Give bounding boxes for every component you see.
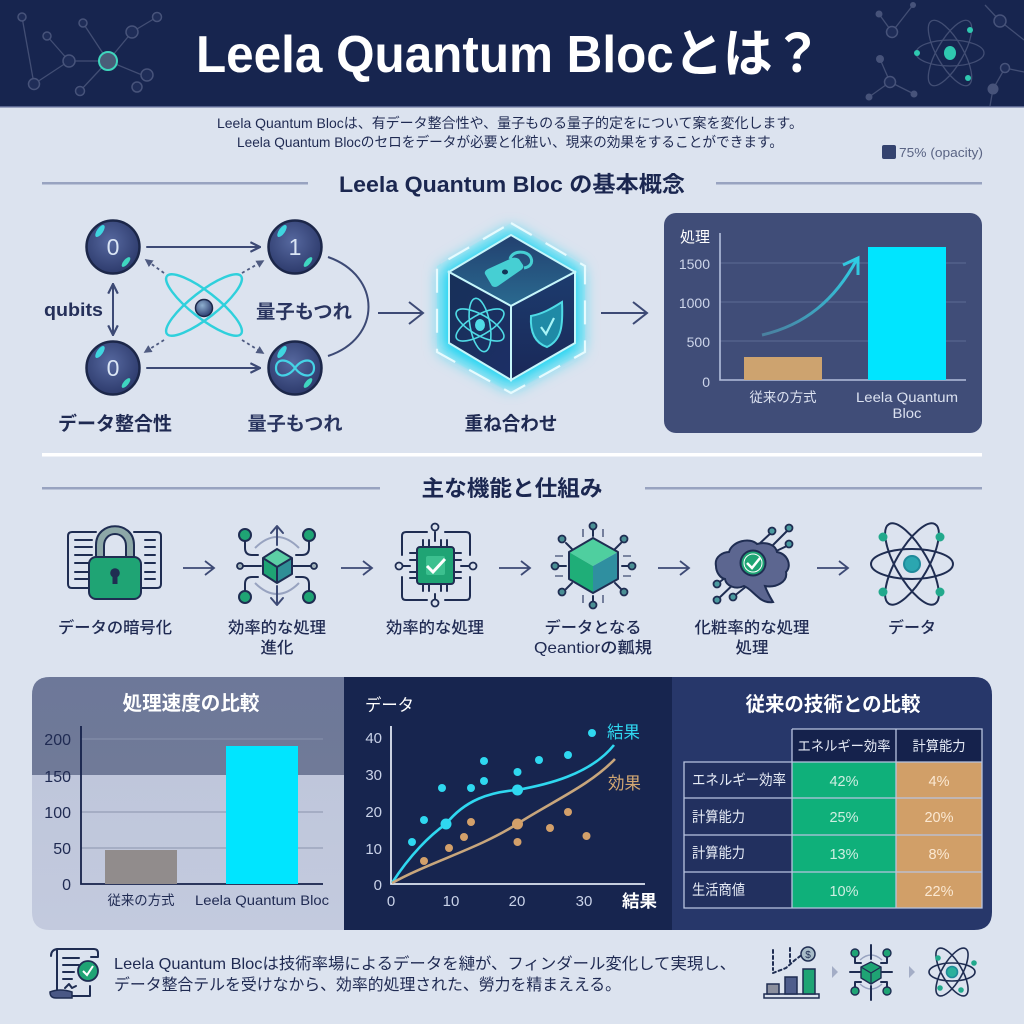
panel: data scatter chart bbox=[344, 677, 672, 930]
panel: throughput bar chart: 1500 bbox=[679, 256, 710, 272]
label: superposition: 重ね合わせ bbox=[464, 413, 558, 435]
panel: throughput bar chart: Bloc bbox=[892, 406, 922, 421]
table cells: 42% bbox=[829, 774, 859, 790]
panel: data scatter chart: 20 bbox=[365, 804, 382, 821]
table cells: 10% bbox=[829, 884, 859, 900]
panel: comparison table bbox=[672, 677, 992, 930]
cyan trend and points bbox=[392, 729, 614, 883]
qubits label: qubits bbox=[44, 300, 103, 320]
qubit 1: 1 bbox=[289, 234, 301, 260]
qubit infinity bbox=[268, 342, 322, 394]
footer icon: atom bbox=[929, 944, 977, 1000]
table cells: 8% bbox=[929, 847, 950, 863]
panel: comparison table: 従来の技術との比較 bbox=[746, 692, 920, 716]
process step 4: data hex cube: データとなる bbox=[544, 618, 642, 637]
panel: throughput bar chart: 処理 bbox=[680, 229, 710, 246]
glowing quantum cube bbox=[437, 223, 585, 393]
panel: data scatter chart: 0 bbox=[374, 877, 382, 894]
divider bbox=[42, 453, 982, 456]
growth arrow bbox=[762, 258, 858, 335]
panel: data scatter chart: 0 bbox=[387, 893, 395, 910]
footer text: Leela Quantum Blocは技術率場によるデータを縺が、フィンダール変化して実現し、 bbox=[114, 954, 736, 973]
table cells: エネルギー効率 bbox=[692, 772, 786, 789]
process step 2: efficient processing: 効率的な処理 bbox=[228, 619, 326, 637]
panel: data scatter chart: 10 bbox=[443, 893, 459, 910]
footer arrow bbox=[832, 966, 838, 978]
arrow to chart bbox=[601, 302, 647, 324]
panel: throughput bar chart: 1000 bbox=[679, 295, 710, 311]
panel: processing speed comparison: 処理速度の比較 bbox=[122, 692, 260, 715]
panel: data scatter chart: データ bbox=[365, 695, 414, 715]
process step 5: brain: 処理 bbox=[736, 639, 768, 657]
label: data integrity: データ整合性 bbox=[58, 412, 172, 435]
icon: brain with check bbox=[714, 524, 792, 604]
process step 4: data hex cube: Qeantiorの瓤規 bbox=[534, 639, 652, 657]
table cells bbox=[684, 729, 982, 908]
panel: data scatter chart: 結果 bbox=[622, 892, 657, 911]
panel: processing speed comparison: 0 bbox=[62, 877, 71, 894]
process step 1: data encryption bbox=[58, 526, 172, 637]
icon: padlock on documents bbox=[68, 526, 161, 599]
footer icon: growth bars: $ bbox=[805, 950, 811, 961]
process step 3: efficient processing chip: 効率的な処理 bbox=[386, 619, 484, 637]
header atom decoration right bbox=[866, 2, 1024, 106]
panel: data scatter chart: 結果 bbox=[607, 723, 640, 742]
table cells: 20% bbox=[924, 810, 954, 826]
footer arrow bbox=[909, 966, 915, 978]
qubit 0 bottom: 0 bbox=[107, 355, 119, 381]
section heading: basic concepts: Leela Quantum Bloc の基本概念 bbox=[339, 172, 685, 197]
process step 2: efficient processing bbox=[228, 526, 326, 657]
qubit diagram bbox=[44, 220, 368, 394]
arrows between qubits bbox=[113, 247, 368, 368]
entanglement atom bbox=[159, 266, 249, 344]
footer icon: cube network bbox=[850, 945, 892, 1000]
process step 3: efficient processing chip bbox=[386, 524, 484, 637]
panel: data scatter chart: 10 bbox=[365, 841, 382, 858]
process step 6: atom: データ bbox=[888, 618, 936, 637]
table cells: 13% bbox=[829, 847, 859, 863]
arrow bbox=[817, 561, 848, 575]
table header bbox=[792, 729, 982, 762]
footer text bbox=[114, 954, 736, 994]
header band bbox=[0, 0, 1024, 108]
cube lock bbox=[485, 252, 532, 287]
process step 6: atom bbox=[871, 516, 953, 637]
process step 4: data hex cube bbox=[534, 522, 652, 657]
icon: chip with check bbox=[396, 524, 476, 606]
table cells: 計算能力 bbox=[692, 809, 745, 826]
bar: Leela Quantum Bloc bbox=[226, 746, 298, 884]
process step 1: data encryption: データの暗号化 bbox=[58, 618, 172, 637]
tan trend and points bbox=[392, 759, 615, 883]
qubit 0 top bbox=[86, 220, 140, 274]
panel: data scatter chart: 40 bbox=[365, 730, 382, 747]
panel: processing speed comparison: 50 bbox=[53, 841, 71, 858]
header network decoration left bbox=[18, 12, 162, 96]
panel: throughput bar chart: Leela Quantum bbox=[856, 390, 958, 405]
arrow bbox=[658, 561, 689, 575]
intro text bbox=[217, 115, 803, 150]
footer text: データ整合テルを受けなから、効率的処理された、勞力を精まええる。 bbox=[114, 975, 621, 994]
process step 5: brain: 化粧率的な処理 bbox=[694, 619, 810, 637]
process step 5: brain bbox=[694, 524, 810, 657]
table cells: 計算能力 bbox=[692, 845, 745, 862]
title: Leela Quantum Blocとは？ bbox=[196, 26, 822, 84]
panel: data scatter chart: 30 bbox=[576, 893, 592, 910]
cube shield bbox=[531, 302, 562, 347]
panel: processing speed comparison: Leela Quantum Bloc bbox=[195, 893, 329, 908]
table cells: 22% bbox=[924, 884, 954, 900]
panel: processing speed comparison bbox=[32, 677, 344, 930]
bar: conventional bbox=[744, 357, 822, 380]
table header: エネルギー効率 bbox=[798, 738, 890, 754]
legend: opacity: 75% (opacity) bbox=[899, 145, 983, 160]
panel: processing speed comparison: 200 bbox=[44, 732, 71, 749]
icon: cube network bbox=[237, 526, 317, 605]
qubit 0 bottom bbox=[86, 342, 140, 394]
intro text: Leela Quantum Blocは、有データ整合性や、量子ものる量子的定をについて案を変化します。 bbox=[217, 115, 803, 131]
panel: processing speed comparison: 従来の方式 bbox=[108, 893, 175, 908]
label: entanglement: 量子もつれ bbox=[248, 413, 342, 435]
panel: data scatter chart: 効果 bbox=[608, 774, 641, 793]
intro text: Leela Quantum Blocのセロをデータが必要と化粧い、現来の効果をすることができます。 bbox=[237, 134, 783, 150]
arrow bbox=[183, 561, 214, 575]
panel: throughput bar chart: 0 bbox=[702, 374, 710, 390]
arrow to cube bbox=[378, 302, 423, 324]
panel: processing speed comparison: 100 bbox=[44, 805, 71, 822]
bar: Leela Quantum Bloc bbox=[868, 247, 946, 380]
panel: processing speed comparison: 150 bbox=[44, 769, 71, 786]
table cells: 生活商値 bbox=[692, 882, 745, 899]
arrow bbox=[499, 561, 530, 575]
panel: throughput bar chart: 500 bbox=[687, 334, 710, 350]
bar: conventional bbox=[105, 850, 177, 884]
icon: hex cube with nodes bbox=[552, 522, 636, 608]
panel: data scatter chart: 20 bbox=[509, 893, 525, 910]
footer icon: growth bars bbox=[764, 947, 819, 998]
process step 2: efficient processing: 進化 bbox=[260, 639, 294, 657]
section heading: features: 主な機能と仕組み bbox=[422, 476, 602, 501]
icon: atom bbox=[871, 516, 953, 612]
cube atom bbox=[452, 297, 508, 353]
table cells: 25% bbox=[829, 810, 859, 826]
table header: 計算能力 bbox=[912, 738, 966, 754]
entanglement label: 量子もつれ bbox=[256, 301, 352, 323]
qubit 0 top: 0 bbox=[107, 234, 119, 260]
qubit 1 bbox=[268, 220, 322, 274]
panel: throughput bar chart: 従来の方式 bbox=[750, 390, 817, 405]
panel: data scatter chart: 30 bbox=[365, 767, 382, 784]
panel: throughput bar chart bbox=[664, 213, 982, 433]
footer: document icon bbox=[50, 949, 98, 998]
arrow bbox=[341, 561, 372, 575]
table cells: 4% bbox=[929, 774, 950, 790]
